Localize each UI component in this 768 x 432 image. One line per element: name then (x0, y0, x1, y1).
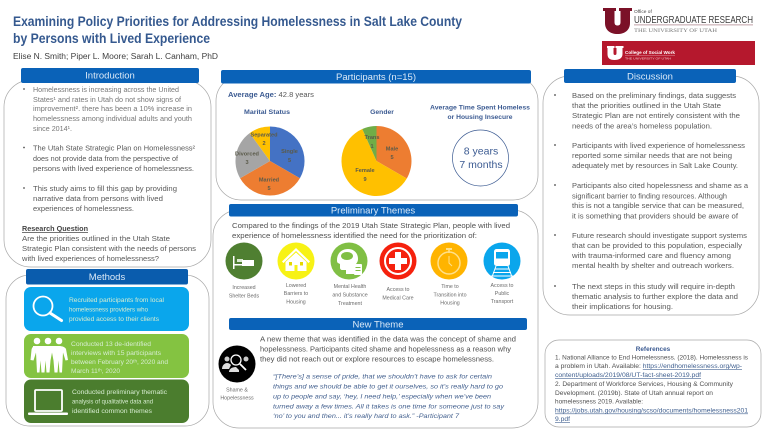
pie chart: marital status: Divorced (235, 152, 260, 158)
icon: time (430, 242, 468, 280)
research question: Are the priorities outlined in the Utah State (22, 234, 170, 243)
references list: a problem in Utah. Available: https://endhomelessness.org/wp- (555, 364, 742, 370)
callout: average time value: 7 months (459, 159, 503, 171)
label: medical care (382, 287, 414, 302)
introduction bullets: does not provide data from the perspective of (33, 154, 178, 163)
panel: participants (216, 70, 538, 200)
discussion bullets: needs of the area’s homeless population. (572, 122, 712, 130)
pie chart: marital status: 3 (245, 160, 249, 166)
panel: references (545, 340, 761, 427)
introduction bullets: States¹ and rates in Utah do not show signs of (33, 95, 181, 104)
label: public transport: Transport (491, 299, 514, 305)
discussion bullets: Participants with lived experience of homelessness (572, 141, 745, 150)
label: housing: Barriers to (284, 291, 308, 297)
pie chart: marital status (235, 126, 305, 196)
themes intro text (232, 221, 510, 240)
pie chart: marital status: 5 (267, 186, 271, 192)
icon: laptop (28, 390, 68, 415)
participants header (221, 70, 531, 84)
label: shelter beds: Increased (232, 285, 256, 291)
pie chart: marital status: 5 (288, 158, 291, 164)
introduction bullets: Homelessness is increasing across the United (33, 85, 179, 94)
new theme header (229, 318, 527, 330)
label: shame and hopelessness: Hopelessness (220, 396, 254, 402)
label: shelter beds: Shelter Beds (229, 294, 260, 300)
panel: methods (6, 269, 209, 426)
label: housing (284, 283, 308, 306)
new theme text: A new theme that was identified in the data was the concept of shame and (260, 334, 516, 344)
references list: content/uploads/2019/08/UT-fact-sheet-2019.pdf (555, 373, 701, 379)
label: mental health: and Substance (332, 292, 368, 298)
references list: https://jobs.utah.gov/housing/scso/documents/homelessness201 (555, 408, 749, 414)
logo: office of undergraduate research: Office of (634, 9, 652, 15)
themes intro text: experience of homelessness identified the need for the prioritization of: (232, 231, 477, 240)
introduction bullets: narrative data from persons with lived (33, 194, 163, 203)
heading: gender: Gender (370, 109, 394, 116)
panel: introduction (4, 68, 211, 267)
label: public transport (491, 283, 514, 305)
method: thematic analysis: Conducted preliminary thematic (72, 389, 167, 396)
logo: office of undergraduate research: THE UNIVERSITY OF UTAH (634, 28, 717, 34)
label: shelter beds (229, 285, 260, 300)
panel: preliminary themes (213, 204, 538, 428)
introduction bullets: persons with lived experience of homelessness. (33, 164, 194, 173)
method: interviews: Conducted 13 de-identified (71, 341, 152, 348)
discussion header: Discussion (627, 72, 673, 82)
discussion bullets: it is something that providers should be aware of (572, 212, 739, 220)
participant quote: up to people and say, ‘hey, I need help,’ especially when we’ve been (273, 394, 491, 400)
research question: Strategic Plan consistent with the needs of persons (22, 244, 196, 253)
label: shame and hopelessness: Shame & (226, 388, 248, 394)
label: mental health: Mental Health (334, 284, 366, 290)
label: medical care: Medical Care (382, 296, 414, 302)
callout: average time value: 8 years (464, 146, 498, 158)
references heading: References (636, 346, 671, 353)
average age: Average Age: 42.8 years (228, 90, 314, 99)
references list: Development. (2019b). State of Utah annual report on (555, 391, 713, 397)
label: time: Transition into (433, 292, 467, 298)
logo: college of social work: College of Social Work (625, 50, 675, 55)
discussion bullets: this is not a tangible service that can be measured, (572, 201, 744, 210)
introduction bullets (23, 85, 196, 213)
discussion header (564, 69, 736, 83)
discussion bullets: adequately met by resources in Salt Lake County. (572, 161, 738, 170)
research question: Research Question (22, 224, 88, 233)
discussion bullets: thematic analysis to further explore the data and (572, 292, 738, 301)
icon: medical care (380, 242, 416, 280)
icon: three people (30, 338, 68, 372)
introduction bullets: experiences of homelessness. (33, 204, 134, 213)
references list: 2. Department of Workforce Services, Housing & Community (555, 382, 733, 388)
icon: shame and hopelessness (218, 346, 256, 382)
preliminary themes header: Preliminary Themes (331, 206, 415, 216)
participant quote: ‘no’ to you and then... it’s really hard to ask.” -Participant 7 (273, 413, 459, 420)
introduction header (21, 68, 199, 83)
label: time (433, 284, 467, 306)
method: recruited participants: Recruited participants from local (69, 297, 164, 304)
method: recruited participants (24, 287, 189, 331)
introduction bullets: The Utah State Strategic Plan on Homelessness² (33, 144, 196, 152)
methods header (26, 269, 188, 284)
method: thematic analysis (24, 380, 189, 423)
pie chart: gender: 5 (390, 155, 394, 161)
discussion bullets: that can be provided to this population, especially (572, 241, 742, 250)
icon: public transport (484, 242, 520, 280)
new theme header: New Theme (352, 320, 404, 330)
new theme text (260, 334, 516, 364)
panel: discussion (543, 69, 759, 315)
references list (555, 356, 749, 423)
label: time: Housing (440, 300, 460, 306)
preliminary themes header (229, 204, 518, 216)
logo: office of undergraduate research (603, 8, 753, 34)
title: Examining Policy Priorities for Addressing Homelessness in Salt Lake County (13, 14, 462, 29)
title (13, 14, 462, 46)
logo: college of social work (602, 41, 755, 65)
discussion bullets: mental health by shelter and outreach workers. (572, 261, 734, 270)
discussion bullets: their implications for housing. (572, 302, 673, 311)
participant quote (273, 374, 505, 420)
icon: mental health (330, 242, 368, 280)
label: public transport: Access to (491, 283, 514, 289)
new theme text: they did not reach out or explore resources to escape homelessness. (260, 354, 494, 364)
heading: average time (430, 104, 530, 121)
themes intro text: Compared to the findings of the 2019 Utah State Strategic Plan, people with lived (232, 221, 510, 230)
callout: average time value (452, 130, 508, 186)
pie chart: gender: Male (386, 146, 398, 152)
discussion bullets (554, 91, 749, 311)
method: recruited participants: provided access to their clients (69, 316, 159, 323)
method: interviews: interviews with 15 participants (71, 350, 161, 357)
discussion bullets: The next steps in this study will require in-depth (572, 282, 735, 291)
label: public transport: Public (495, 291, 510, 297)
discussion bullets: that the priorities outlined in the Utah State (572, 101, 721, 110)
heading: average time: Average Time Spent Homeless (430, 104, 530, 112)
title: by Persons with Lived Experience (13, 31, 210, 46)
participants header: Participants (n=15) (336, 72, 416, 83)
participant quote: “[There’s] a sense of pride, that we shouldn’t have to ask for certain (273, 374, 492, 380)
introduction header: Introduction (85, 70, 135, 82)
pie chart: marital status: Married (259, 178, 280, 184)
discussion bullets: significant barrier to finding resources. Although (572, 192, 727, 200)
discussion bullets: Participants also cited hopelessness and shame as a (572, 181, 749, 190)
methods header: Methods (89, 272, 125, 283)
pie chart: gender: 9 (363, 177, 367, 183)
pie chart: marital status: Separated (250, 132, 278, 138)
label: mental health: Treatment (338, 301, 362, 307)
heading: marital status: Marital Status (244, 109, 290, 116)
discussion bullets: Based on the preliminary findings, data suggests (572, 91, 736, 100)
pie chart: gender: 1 (370, 144, 374, 150)
icon: housing (278, 242, 314, 280)
discussion bullets: Future research should investigate support systems (572, 231, 747, 240)
label: mental health (332, 284, 368, 307)
pie chart: gender: Female (355, 168, 375, 174)
method: interviews (24, 334, 189, 378)
label: medical care: Access to (387, 287, 410, 293)
introduction bullets: improvement². there has been a 10% increase in (33, 104, 192, 113)
introduction bullets: This study aims to fill this gap by providing (33, 184, 177, 193)
pie chart: marital status: 2 (262, 141, 266, 147)
authors: Elise N. Smith; Piper L. Moore; Sarah L. Canham, PhD (13, 52, 218, 61)
heading: average time: or Housing Insecure (448, 114, 513, 121)
discussion bullets: Strategic Plan are not entirely consistent with the (572, 111, 740, 120)
discussion bullets: with trauma-informed care and fluency among (571, 251, 731, 260)
label: housing: Housing (286, 300, 306, 306)
participant quote: turned away a few times. All it takes is one time for someone just to say (273, 404, 505, 410)
logo: college of social work: THE UNIVERSITY OF UTAH (625, 56, 671, 60)
method: thematic analysis: analysis of qualitative data and (72, 398, 154, 406)
pie chart: gender (341, 126, 411, 196)
label: time: Time to (441, 284, 459, 290)
research question (21, 224, 196, 263)
discussion bullets: reported some similar needs that are not being (572, 151, 732, 160)
label: housing: Lowered (286, 283, 306, 289)
pie chart: marital status: Single (281, 149, 298, 155)
method: interviews: March 11ᵗʰ, 2020 (71, 368, 121, 375)
participant quote: things and we should be able to get it ourselves, so it’s really hard to go (273, 384, 503, 390)
references list: homelessness 2019. Available: (555, 400, 643, 406)
references list: 9.pdf (555, 417, 570, 423)
pie chart: gender: Trans (365, 135, 379, 141)
method: thematic analysis: identified common themes (72, 408, 152, 415)
method: recruited participants: homelessness providers who (69, 306, 149, 314)
label: shame and hopelessness (220, 388, 254, 402)
research question: with lived experiences of homelessness? (21, 254, 159, 263)
method: interviews: between February 20ᵗʰ, 2020 and (71, 359, 169, 366)
icon: magnifying glass (34, 296, 62, 320)
introduction bullets: since 2014¹. (33, 124, 72, 133)
references list: 1. National Alliance to End Homelessness. (2018). Homelessness is (555, 356, 748, 362)
introduction bullets: homelessness among individual adults and youth (33, 114, 192, 123)
new theme text: hopelessness. Participants cited shame and hopelessness as a reason why (260, 344, 511, 354)
icon: shelter beds (226, 242, 262, 280)
